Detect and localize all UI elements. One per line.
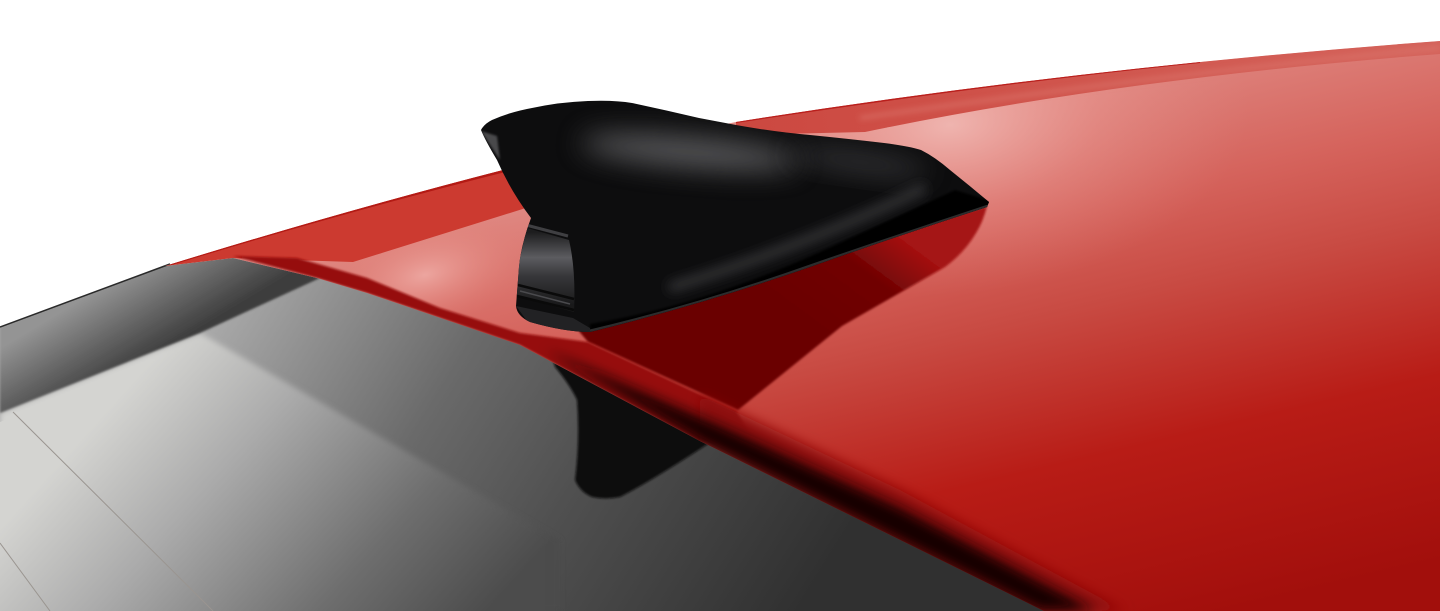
fin: foot	[516, 306, 590, 332]
glass: heater line lower	[0, 543, 50, 611]
fin: right sheen	[789, 143, 931, 181]
antenna reflection in glass	[552, 362, 708, 500]
fin: grey base	[516, 228, 574, 312]
fin: main body	[481, 101, 989, 332]
roof: main soft highlight	[803, 90, 1155, 258]
glass: pale defroster area	[0, 422, 32, 611]
antenna fin	[481, 101, 995, 340]
fin: base upper line	[526, 225, 568, 236]
rear window glass	[0, 250, 1060, 611]
glass: heater line	[13, 412, 213, 611]
roof: lip pink stripe	[861, 57, 1344, 120]
fin: base ridges	[517, 285, 574, 310]
fin: skirt black band	[590, 190, 995, 340]
roof: right top lip strip	[736, 41, 1440, 135]
glass: top-left dark edge	[0, 264, 170, 327]
roof: left lip strip	[165, 165, 540, 266]
glass: pale defroster soft edge	[0, 333, 468, 494]
roof: window edge red lip	[233, 256, 760, 450]
roof: left panel sheen	[372, 246, 486, 310]
roof: window edge black shadow	[545, 350, 1095, 611]
glass: dark upper band	[0, 250, 320, 413]
roof: window edge soft red transition	[700, 395, 1125, 611]
roof: left lip dark top line	[170, 171, 503, 264]
fin: nose rim	[481, 131, 500, 160]
antenna reflection in roof	[578, 206, 987, 410]
fin: base ridge highlight	[520, 291, 570, 304]
fin: skirt edge	[590, 206, 988, 331]
fin: lower edge sheen	[669, 188, 925, 288]
fin: top sheen	[579, 127, 801, 177]
roof: lip thin top line	[736, 62, 1200, 122]
